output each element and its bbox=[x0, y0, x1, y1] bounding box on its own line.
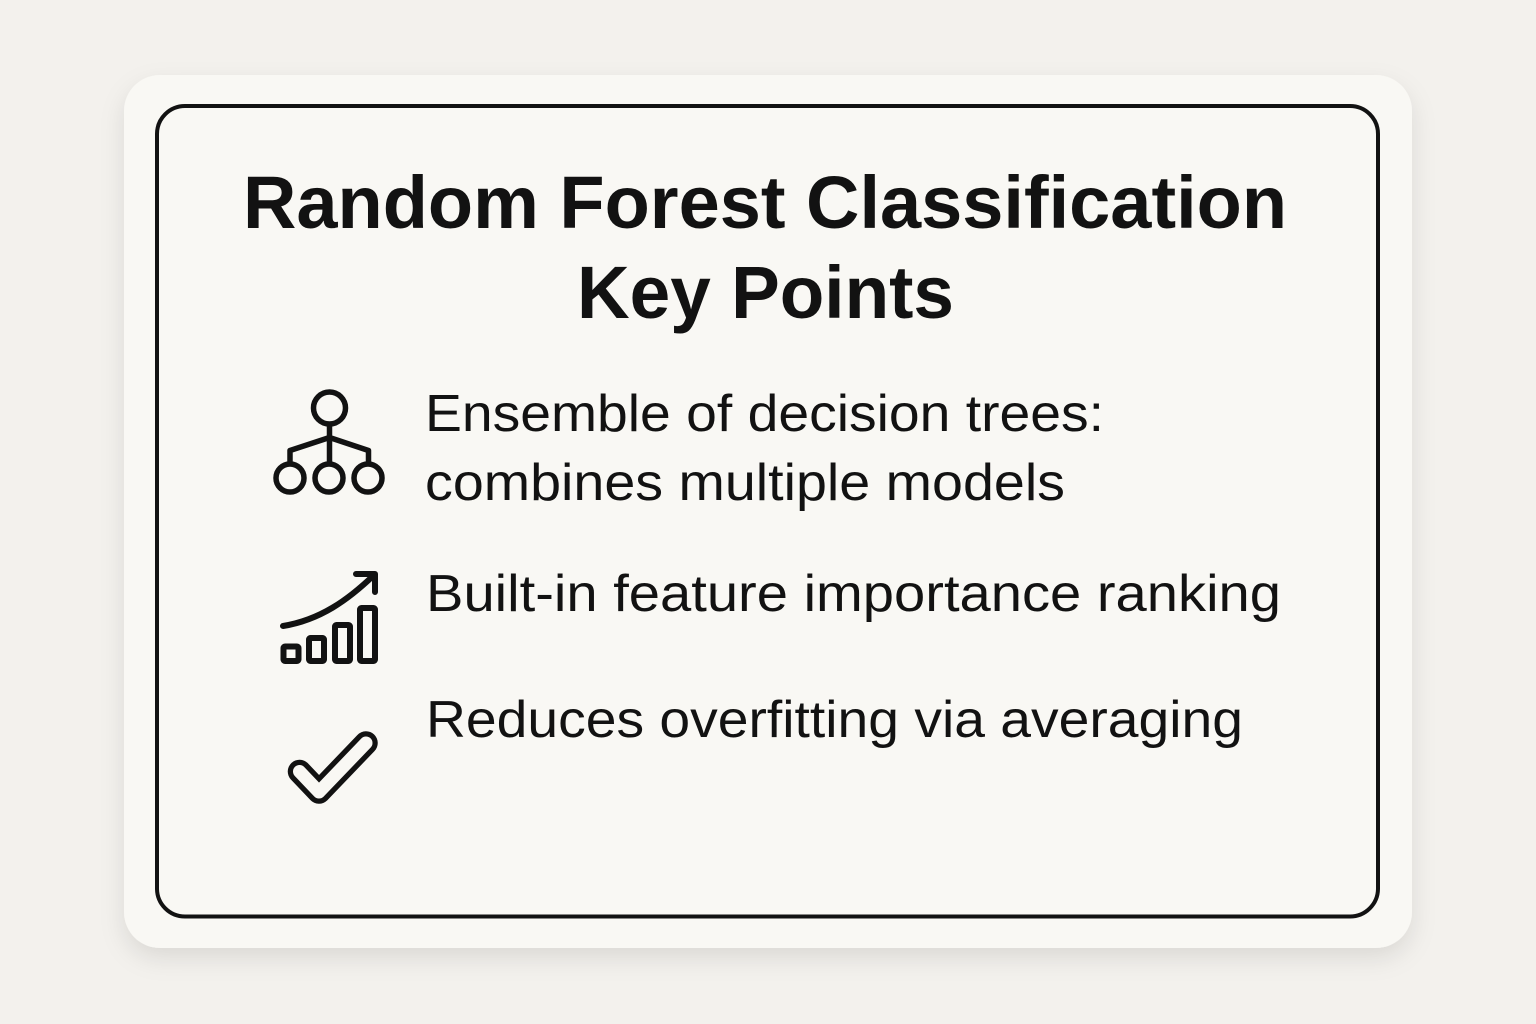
panel: card border bbox=[157, 106, 1378, 916]
text: ensemble of decision trees: combines multiple models bbox=[425, 454, 1065, 512]
title bbox=[243, 161, 1287, 334]
panel: card bbox=[124, 75, 1412, 948]
icon: check mark bbox=[300, 743, 366, 792]
title: Random Forest Classification bbox=[243, 161, 1287, 244]
icon: rising bar chart bbox=[283, 574, 375, 661]
text: ensemble of decision trees bbox=[425, 385, 1104, 512]
text: feature importance: Built-in feature importance ranking bbox=[426, 565, 1281, 623]
title: Key Points bbox=[577, 251, 954, 334]
text: ensemble of decision trees: Ensemble of decision trees: bbox=[425, 385, 1104, 443]
icon: tree hierarchy bbox=[276, 392, 382, 492]
text: reduces overfitting: Reduces overfitting via averaging bbox=[426, 691, 1243, 749]
